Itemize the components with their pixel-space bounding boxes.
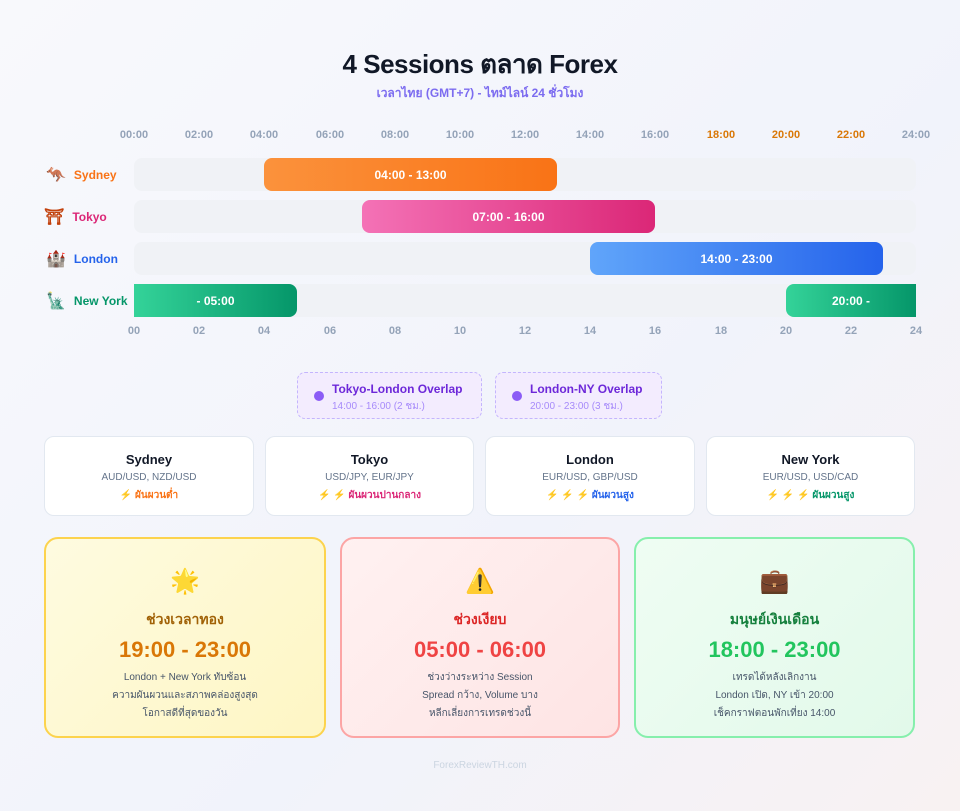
overlap: London-NY: London-NY Overlap bbox=[530, 382, 642, 396]
card: Tokyo: ⚡ ⚡ ผันผวนปานกลาง bbox=[318, 490, 421, 501]
panel: golden hours: โอกาสดีที่สุดของวัน bbox=[142, 708, 228, 719]
icon: star: 🌟 bbox=[170, 568, 200, 595]
row: New York: 🗽 bbox=[46, 292, 66, 310]
card: New York: ⚡ ⚡ ⚡ ผันผวนสูง bbox=[767, 490, 854, 501]
card: New York bbox=[706, 436, 915, 516]
bottom hour axis: 24 bbox=[910, 325, 922, 337]
panel: quiet hours: ช่วงเงียบ bbox=[454, 611, 506, 627]
card: Sydney bbox=[44, 436, 254, 516]
panel: quiet hours: หลีกเลี่ยงการเทรดช่วงนี้ bbox=[429, 708, 531, 719]
top time axis bbox=[120, 129, 930, 141]
card: Sydney: Sydney bbox=[126, 452, 172, 467]
panel: golden hours: London + New York ทับซ้อน bbox=[124, 672, 246, 683]
top time axis: 24:00 bbox=[902, 129, 930, 141]
panel: office workers: เทรดได้หลังเลิกงาน bbox=[733, 672, 816, 683]
panel: quiet hours: ช่วงว่างระหว่าง Session bbox=[427, 672, 533, 683]
panel: office workers: London เปิด, NY เข้า 20:00 bbox=[715, 690, 834, 701]
row: New York bbox=[46, 284, 916, 317]
top time axis: 06:00 bbox=[316, 129, 344, 141]
card: Tokyo: USD/JPY, EUR/JPY bbox=[325, 472, 414, 483]
card: London bbox=[485, 436, 695, 516]
card: London: EUR/USD, GBP/USD bbox=[542, 472, 638, 483]
panel: golden hours: ช่วงเวลาทอง bbox=[146, 611, 224, 627]
panel: quiet hours: Spread กว้าง, Volume บาง bbox=[422, 690, 538, 701]
bottom hour axis bbox=[128, 325, 922, 337]
icon: warning: ⚠️ bbox=[465, 568, 495, 595]
top time axis: 14:00 bbox=[576, 129, 604, 141]
footer: ForexReviewTH.com bbox=[433, 760, 527, 771]
panel: quiet hours: 05:00 - 06:00 bbox=[414, 637, 546, 662]
overlap: London-NY: 20:00 - 23:00 (3 ชม.) bbox=[530, 401, 623, 412]
top time axis: 12:00 bbox=[511, 129, 539, 141]
bottom hour axis: 06 bbox=[324, 325, 336, 337]
icon: briefcase: 💼 bbox=[760, 568, 789, 595]
bottom hour axis: 00 bbox=[128, 325, 140, 337]
top time axis: 10:00 bbox=[446, 129, 474, 141]
row: New York: 20:00 - bbox=[832, 294, 870, 308]
row: New York: - 05:00 bbox=[196, 294, 235, 308]
bottom hour axis: 14 bbox=[584, 325, 596, 337]
panel: office workers bbox=[634, 537, 915, 738]
row: Tokyo: 07:00 - 16:00 bbox=[472, 210, 545, 224]
bottom hour axis: 12 bbox=[519, 325, 531, 337]
bottom hour axis: 08 bbox=[389, 325, 401, 337]
card: Tokyo: Tokyo bbox=[351, 452, 388, 467]
row: Tokyo: ⛩ bbox=[44, 208, 64, 226]
row: Sydney bbox=[46, 158, 557, 191]
top time axis: 02:00 bbox=[185, 129, 213, 141]
bottom hour axis: 02 bbox=[193, 325, 205, 337]
card: New York: EUR/USD, USD/CAD bbox=[763, 472, 858, 483]
top time axis: 00:00 bbox=[120, 129, 148, 141]
bottom hour axis: 10 bbox=[454, 325, 466, 337]
row: New York: New York bbox=[74, 294, 128, 308]
card: Sydney: AUD/USD, NZD/USD bbox=[101, 472, 196, 483]
row: London: London bbox=[74, 252, 118, 266]
top time axis: 20:00 bbox=[772, 129, 800, 141]
panel: golden hours: ความผันผวนและสภาพคล่องสูงสุด bbox=[112, 690, 258, 701]
card: Tokyo bbox=[265, 436, 474, 516]
row: London: 14:00 - 23:00 bbox=[700, 252, 773, 266]
row: Tokyo bbox=[44, 200, 655, 233]
bottom hour axis: 22 bbox=[845, 325, 857, 337]
title: 4 Sessions ตลาด Forex bbox=[343, 49, 617, 79]
subtitle: เวลาไทย (GMT+7) - ไทม์ไลน์ 24 ชั่วโมง bbox=[377, 86, 583, 100]
bottom hour axis: 04 bbox=[258, 325, 270, 337]
top time axis: 18:00 bbox=[707, 129, 735, 141]
panel: quiet hours bbox=[340, 537, 620, 738]
overlap: Tokyo-London: 14:00 - 16:00 (2 ชม.) bbox=[332, 401, 425, 412]
panel: office workers: เช็คกราฟตอนพักเที่ยง 14:00 bbox=[714, 708, 835, 719]
panel: office workers: 18:00 - 23:00 bbox=[708, 637, 841, 662]
top time axis: 04:00 bbox=[250, 129, 278, 141]
bottom hour axis: 20 bbox=[780, 325, 792, 337]
row: Sydney: Sydney bbox=[74, 168, 117, 182]
row: London bbox=[46, 242, 883, 275]
row: Tokyo: Tokyo bbox=[72, 210, 107, 224]
card: London: London bbox=[566, 452, 614, 467]
top time axis: 16:00 bbox=[641, 129, 669, 141]
bottom hour axis: 18 bbox=[715, 325, 727, 337]
card: Sydney: ⚡ ผันผวนต่ำ bbox=[120, 490, 178, 501]
top time axis: 08:00 bbox=[381, 129, 409, 141]
row: London: 🏰 bbox=[46, 250, 66, 268]
top time axis: 22:00 bbox=[837, 129, 865, 141]
panel: golden hours bbox=[44, 537, 326, 738]
card: London: ⚡ ⚡ ⚡ ผันผวนสูง bbox=[546, 490, 634, 501]
overlap: Tokyo-London bbox=[297, 372, 482, 419]
overlap: London-NY bbox=[495, 372, 662, 419]
panel: golden hours: 19:00 - 23:00 bbox=[119, 637, 251, 662]
row: Sydney: 🦘 bbox=[46, 166, 66, 184]
bottom hour axis: 16 bbox=[649, 325, 661, 337]
overlap: Tokyo-London: Tokyo-London Overlap bbox=[332, 382, 462, 396]
panel: office workers: มนุษย์เงินเดือน bbox=[730, 611, 819, 627]
row: Sydney: 04:00 - 13:00 bbox=[374, 168, 447, 182]
timeline chart bbox=[44, 129, 930, 337]
card: New York: New York bbox=[781, 452, 840, 467]
